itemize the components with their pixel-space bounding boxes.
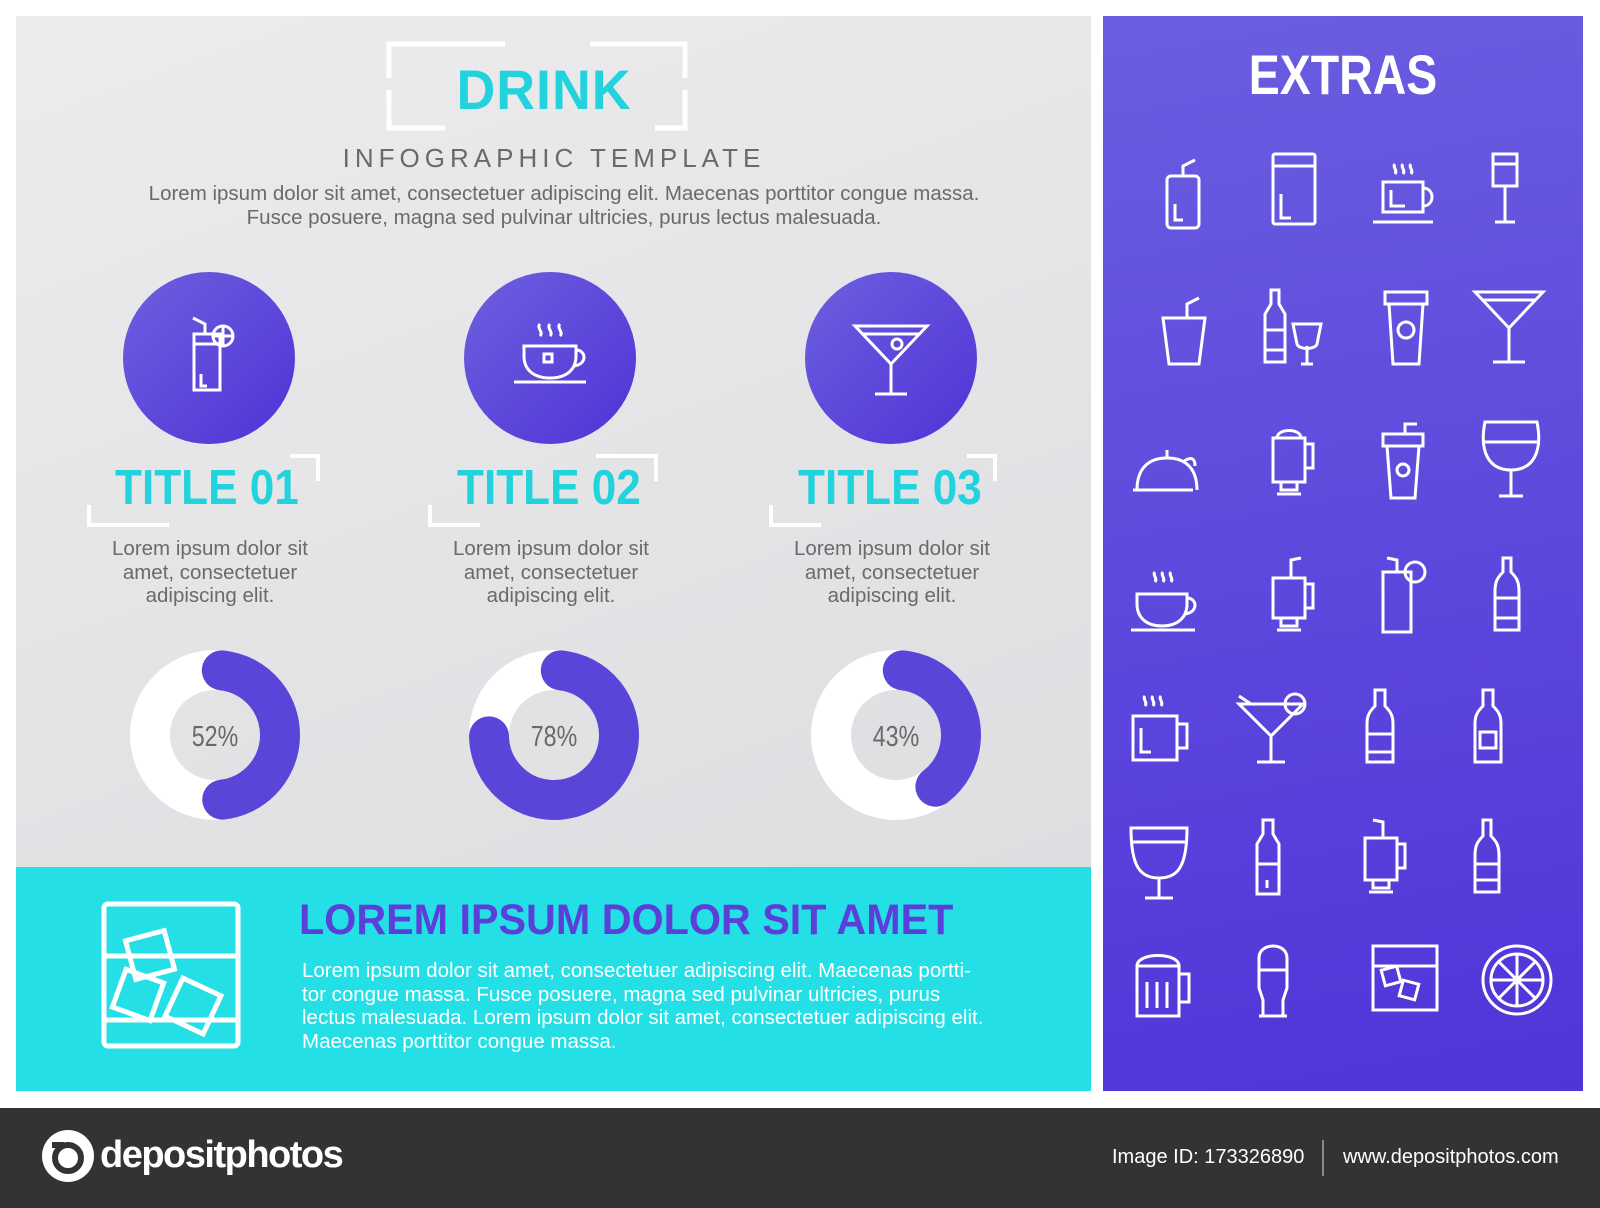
column 1	[87, 272, 320, 607]
bottom text: lectus malesuada. Lorem ipsum dolor sit amet, consectetuer adipiscing elit.	[302, 1006, 983, 1029]
title 01: TITLE 01	[115, 461, 299, 515]
footer logo	[42, 1130, 342, 1182]
icon grid	[1130, 152, 1552, 1018]
bottom text: Lorem ipsum dolor sit amet, consectetuer adipiscing elit. Maecenas portti-	[302, 959, 971, 982]
title 03	[769, 454, 997, 527]
text 02: adipiscing elit.	[487, 584, 615, 607]
title 02: TITLE 02	[457, 461, 641, 515]
donut chart 52%: 52%	[192, 719, 238, 753]
text 01: amet, consectetuer	[123, 560, 297, 584]
icon circle: juice	[123, 272, 295, 444]
donut chart 43%	[811, 650, 981, 820]
intro text	[149, 182, 979, 228]
right panel: extras	[1103, 16, 1583, 1091]
donut chart 78%	[469, 650, 639, 820]
left panel background	[16, 16, 1091, 1091]
title: DRINK: DRINK	[456, 58, 632, 121]
footer logo: depositphotos	[100, 1134, 342, 1176]
bottom text: Maecenas porttitor congue massa.	[302, 1030, 616, 1053]
column 3	[769, 272, 997, 607]
cyan band	[16, 867, 1091, 1091]
donut chart 52%	[130, 650, 300, 820]
column 2	[428, 272, 658, 607]
text 02: amet, consectetuer	[464, 560, 638, 584]
icon circle: martini	[805, 272, 977, 444]
icon: whiskey glass with ice	[102, 902, 240, 1048]
bottom heading: LOREM IPSUM DOLOR SIT AMET	[299, 896, 953, 944]
footer url: www.depositphotos.com	[1343, 1146, 1559, 1168]
intro text: Lorem ipsum dolor sit amet, consectetuer adipiscing elit. Maecenas porttitor congue massa.	[149, 182, 979, 205]
text 01: adipiscing elit.	[146, 584, 274, 607]
donut chart 78%: 78%	[531, 719, 577, 753]
extras heading: EXTRAS	[1249, 43, 1437, 106]
bottom text: tor congue massa. Fusce posuere, magna sed pulvinar ultricies, purus	[302, 983, 940, 1006]
donut chart 43%: 43%	[873, 719, 919, 753]
title frame brackets	[386, 42, 688, 130]
text 01	[112, 537, 308, 607]
title 02	[428, 454, 658, 527]
text 02: Lorem ipsum dolor sit	[453, 537, 649, 560]
title 03: TITLE 03	[798, 461, 982, 515]
icon circle: tea	[464, 272, 636, 444]
subtitle: INFOGRAPHIC TEMPLATE	[343, 143, 765, 173]
text 03: adipiscing elit.	[828, 584, 956, 607]
footer bar	[0, 1108, 1600, 1208]
text 03: amet, consectetuer	[805, 560, 979, 584]
text 01: Lorem ipsum dolor sit	[112, 537, 308, 560]
bottom text	[302, 959, 983, 1053]
text 02	[453, 537, 649, 607]
intro text: Fusce posuere, magna sed pulvinar ultricies, purus lectus malesuada.	[247, 206, 881, 228]
text 03	[794, 537, 990, 607]
title 01	[87, 454, 320, 527]
footer image id: Image ID: 173326890	[1112, 1146, 1304, 1168]
text 03: Lorem ipsum dolor sit	[794, 537, 990, 560]
